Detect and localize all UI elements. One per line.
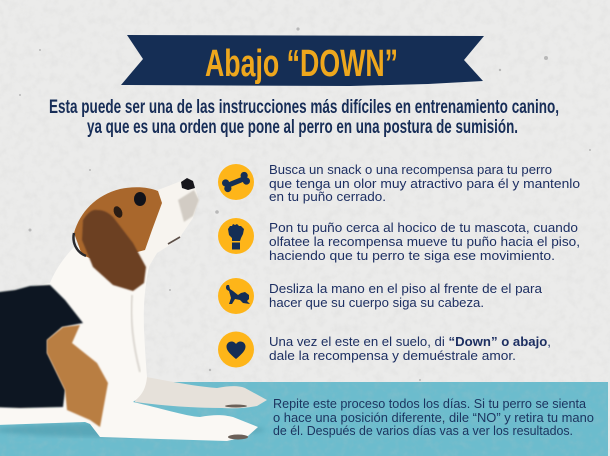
step 2 text: haciendo que tu perro te siga ese movimiento. [269, 248, 555, 263]
step 3 icon: bowing dog [218, 278, 254, 314]
dark collar edge [74, 233, 86, 256]
dog body [0, 245, 258, 441]
dog illustration [0, 178, 267, 441]
mouth line [168, 237, 180, 244]
step 4 text [269, 334, 551, 363]
step 1 text: Busca un snack o una recompensa para tu perro [269, 162, 552, 177]
step 2 text: olfatee la recompensa mueve tu puño hacia el piso, [269, 234, 580, 249]
tan face [74, 187, 162, 262]
neck shading [131, 295, 140, 372]
closing note: o hace una posición diferente, dile “NO” y retira tu mano [273, 410, 594, 425]
paw marks [225, 404, 248, 440]
eye [134, 192, 146, 206]
nose [181, 178, 195, 190]
closing note: Repite este proceso todos los días. Si tu perro se sienta [273, 396, 587, 411]
rear foreleg [135, 376, 267, 408]
subtitle [49, 97, 559, 138]
step 3 text: Desliza la mano en el piso al frente de el para [269, 281, 543, 296]
title banner [121, 35, 484, 86]
brow mark [112, 205, 124, 219]
title: Abajo “DOWN” [205, 43, 398, 85]
step 4 text: dale la recompensa y demuéstrale amor. [269, 348, 516, 363]
step 1 text: que tenga un olor muy atractivo para él y mantenlo [269, 176, 580, 191]
step 2 icon: fist [218, 218, 254, 254]
step 1 text [269, 162, 580, 204]
step 2 text [269, 220, 580, 263]
step 4 icon: heart [218, 332, 254, 368]
closing note: de él. Después de varios días vas a ver los resultados. [273, 423, 573, 438]
step 1 text: en tu puño cerrado. [269, 189, 386, 204]
step 1 icon: bone [218, 164, 254, 200]
muzzle greying [178, 190, 199, 222]
head [74, 178, 199, 273]
tan shoulder [47, 325, 108, 427]
black saddle [0, 285, 83, 408]
step 2 text: Pon tu puño cerca al hocico de tu mascota, cuando [269, 220, 578, 235]
step 4 text: Una vez el este en el suelo, di “Down” o abajo, [269, 334, 551, 349]
step 3 text: hacer que su cuerpo siga su cabeza. [269, 295, 484, 310]
ear [82, 210, 146, 291]
closing note [273, 396, 594, 438]
step 3 text [269, 281, 543, 310]
